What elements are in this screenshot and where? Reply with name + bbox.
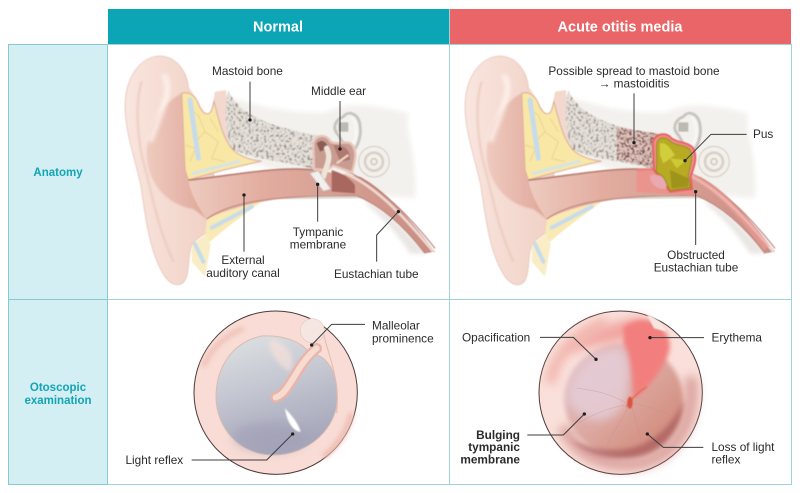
panel: acute otitis media otoscopic view — [460, 311, 775, 474]
row label: Anatomy — [8, 44, 108, 300]
label: tympanic membrane: membrane — [290, 238, 347, 252]
header: Normal: Normal — [253, 20, 303, 36]
label: bulging tympanic membrane: Bulging — [476, 428, 520, 442]
label: bulging tympanic membrane: tympanic — [468, 440, 520, 454]
label: tympanic membrane: Tympanic — [293, 225, 343, 239]
label: bulging tympanic membrane: membrane — [460, 452, 520, 466]
label: bulging tympanic membrane — [460, 412, 586, 466]
label: mastoid bone: Mastoid bone — [212, 64, 283, 78]
label: malleolar prominence — [310, 318, 434, 347]
panel: normal anatomy — [125, 56, 435, 285]
label: external auditory canal: External — [221, 253, 265, 267]
ear illustration: acute otitis media — [465, 56, 775, 285]
label: middle ear: Middle ear — [311, 84, 366, 98]
ear illustration: normal — [125, 56, 435, 285]
label: malleolar prominence: prominence — [372, 332, 434, 346]
label: obstructed eustachian tube — [654, 190, 739, 274]
label: external auditory canal — [206, 193, 280, 280]
label: possible spread to mastoid bone: → mastoiditis — [599, 76, 669, 90]
panel: acute otitis media anatomy — [465, 56, 775, 285]
label: opacification — [462, 330, 598, 361]
label: tympanic membrane — [290, 183, 347, 252]
eardrum: normal — [194, 311, 357, 474]
row label: Otoscopic examination — [8, 300, 108, 484]
label: pus: Pus — [753, 127, 773, 141]
eardrum: acute otitis media — [539, 311, 702, 474]
label: opacification: Opacification — [462, 330, 530, 344]
label: possible spread to mastoid bone — [548, 64, 720, 144]
label: loss of light reflex: Loss of light — [712, 440, 775, 454]
label: light reflex — [126, 432, 294, 467]
label: mastoid bone — [212, 64, 283, 122]
label: eustachian tube: Eustachian tube — [334, 267, 419, 281]
label: light reflex: Light reflex — [126, 453, 183, 467]
label: eustachian tube — [334, 210, 419, 281]
label: pus — [683, 127, 773, 162]
label: possible spread to mastoid bone: Possible spread to mastoid bone — [548, 64, 720, 78]
row label: Otoscopic examination: examination — [24, 395, 92, 407]
panel: normal otoscopic view — [126, 311, 434, 474]
header: Acute otitis media — [450, 9, 791, 44]
label: erythema — [648, 330, 762, 344]
row label: Otoscopic examination: Otoscopic — [30, 382, 87, 394]
row label: Anatomy: Anatomy — [33, 167, 83, 179]
label: malleolar prominence: Malleolar — [372, 318, 420, 332]
header: Acute otitis media: Acute otitis media — [558, 20, 683, 36]
label: loss of light reflex — [646, 432, 775, 466]
label: loss of light reflex: reflex — [712, 452, 740, 466]
label: middle ear — [311, 84, 366, 151]
header: Normal — [108, 9, 449, 44]
label: erythema: Erythema — [712, 330, 762, 344]
label: external auditory canal: auditory canal — [206, 266, 280, 280]
label: obstructed eustachian tube: Obstructed — [667, 248, 725, 262]
label: obstructed eustachian tube: Eustachian tube — [654, 260, 739, 274]
